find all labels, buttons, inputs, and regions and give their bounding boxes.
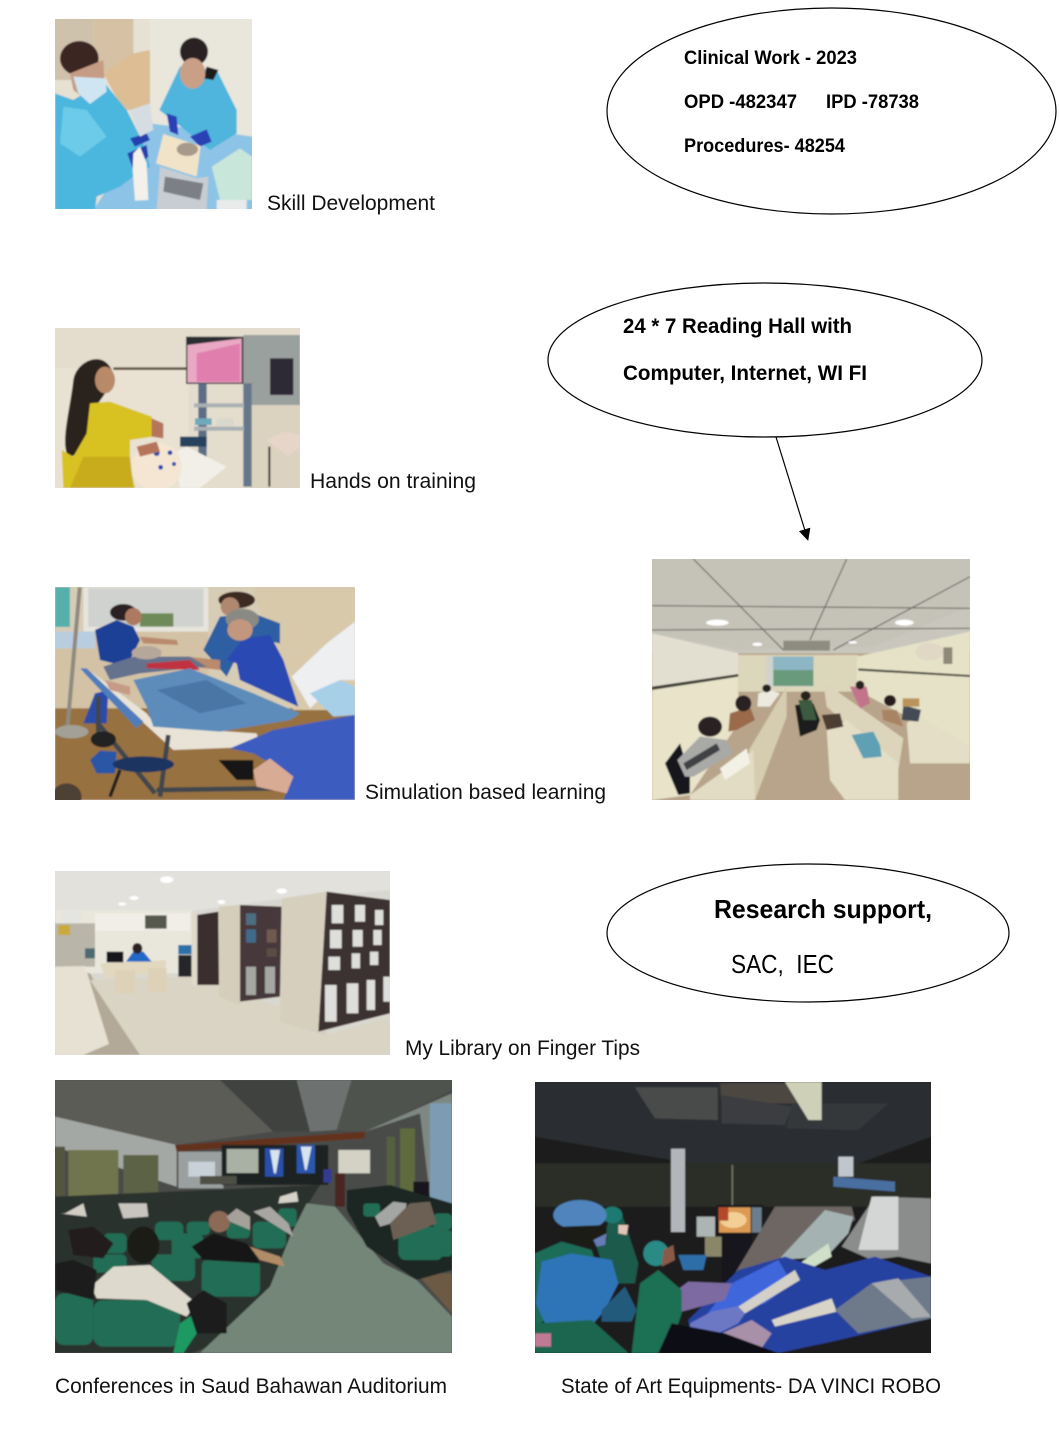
callout: reading hall: Computer, Internet, WI FI	[623, 362, 867, 385]
arrow: reading hall callout to photo	[776, 437, 807, 537]
photo: library	[55, 871, 390, 1055]
caption: auditorium conference: Conferences in Saud Bahawan Auditorium	[55, 1375, 447, 1398]
callout: clinical work: Clinical Work - 2023	[684, 48, 857, 69]
photo: auditorium conference	[55, 1080, 452, 1353]
callout: clinical work: OPD -482347	[684, 92, 797, 113]
callout: reading hall: 24 * 7 Reading Hall with	[623, 315, 852, 338]
callout: clinical work	[607, 8, 1056, 214]
callout: clinical work: IPD -78738	[826, 92, 919, 113]
photo: da vinci robot	[535, 1082, 931, 1353]
caption: simulation based learning: Simulation based learning	[365, 781, 606, 804]
caption: skill development: Skill Development	[267, 192, 435, 215]
callout: reading hall	[548, 283, 982, 437]
photo: simulation based learning	[55, 587, 355, 800]
photo: skill development	[55, 19, 252, 209]
photo: hands on training	[55, 328, 300, 488]
photo: reading hall	[652, 559, 970, 800]
callout: research support	[607, 864, 1009, 1002]
caption: library: My Library on Finger Tips	[405, 1037, 640, 1060]
caption: da vinci robot: State of Art Equipments- DA VINCI ROBO	[561, 1375, 941, 1398]
callout: research support: SAC, IEC	[731, 949, 834, 979]
callout: research support: Research support,	[714, 894, 932, 924]
caption: hands on training: Hands on training	[310, 470, 476, 493]
callout: clinical work: Procedures- 48254	[684, 136, 845, 157]
